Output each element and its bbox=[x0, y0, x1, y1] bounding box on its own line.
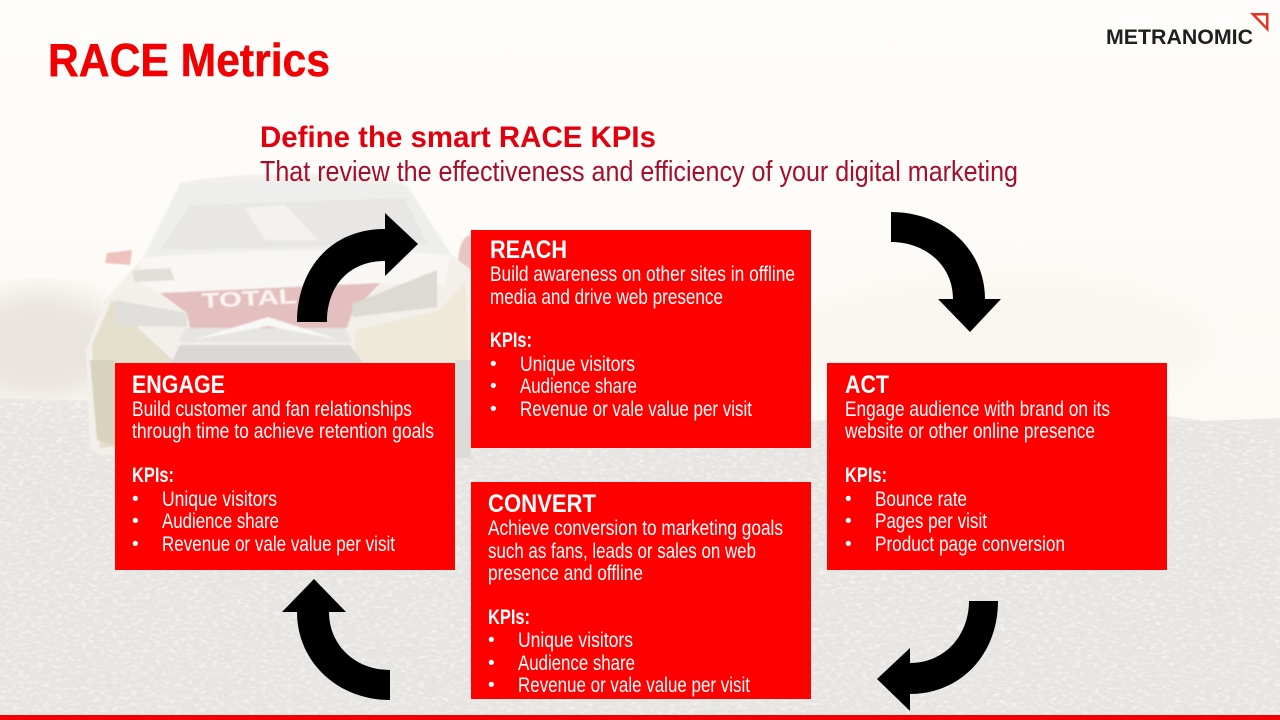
panel: reach: Build awareness on other sites in offline bbox=[490, 263, 795, 286]
panel: reach: • bbox=[490, 399, 497, 420]
panel: act: website or other online presence bbox=[844, 420, 1095, 443]
panel: engage: through time to achieve retention goals bbox=[132, 420, 434, 443]
panel: engage: • bbox=[132, 489, 139, 510]
logo: Metranomic bbox=[1106, 13, 1268, 49]
car silhouette: TOTAL bbox=[201, 285, 297, 313]
panel: act: ACT bbox=[845, 371, 889, 399]
panel: reach: Audience share bbox=[520, 375, 637, 398]
panel: reach: REACH bbox=[490, 236, 567, 264]
arrow: act to convert bbox=[877, 601, 998, 711]
panel: act: Bounce rate bbox=[875, 488, 967, 511]
arrow: reach to act bbox=[891, 212, 1001, 332]
subtitle heading: Define the smart RACE KPIs bbox=[260, 121, 656, 154]
panel: engage: Unique visitors bbox=[162, 488, 277, 511]
car silhouette bbox=[86, 174, 471, 458]
panel: act: • bbox=[845, 534, 852, 555]
panel: convert: • bbox=[488, 653, 495, 674]
panel: reach: • bbox=[490, 376, 497, 397]
panel: convert: • bbox=[488, 675, 495, 696]
arrow: convert to engage bbox=[282, 579, 390, 700]
panel: engage: • bbox=[132, 534, 139, 555]
panel: convert: Audience share bbox=[518, 652, 635, 675]
panel: act bbox=[827, 363, 1167, 570]
panel: convert: Revenue or vale value per visit bbox=[518, 674, 750, 697]
panel: engage: Build customer and fan relationships bbox=[132, 398, 412, 421]
panel: convert bbox=[471, 482, 811, 699]
panel: act: • bbox=[845, 489, 852, 510]
panel: engage: Revenue or vale value per visit bbox=[162, 533, 395, 556]
panel: convert: such as fans, leads or sales on web bbox=[488, 540, 756, 563]
panel: act: Engage audience with brand on its bbox=[845, 398, 1110, 421]
logo: Metranomic: METRANOMIC bbox=[1106, 26, 1253, 49]
panel: act: KPIs: bbox=[845, 464, 887, 487]
panel: convert: presence and offline bbox=[488, 562, 643, 585]
panel: reach: Unique visitors bbox=[520, 353, 635, 376]
panel: reach: Revenue or vale value per visit bbox=[520, 398, 752, 421]
panel: convert: • bbox=[488, 630, 495, 651]
panel: reach: media and drive web presence bbox=[490, 286, 723, 309]
panel: reach bbox=[471, 230, 811, 448]
panel: engage: Audience share bbox=[162, 510, 279, 533]
title: RACE Metrics bbox=[48, 34, 330, 86]
footer bar bbox=[0, 715, 1280, 720]
panel: convert: KPIs: bbox=[488, 606, 530, 629]
panel: reach: KPIs: bbox=[490, 329, 532, 352]
panel: convert: Unique visitors bbox=[518, 629, 633, 652]
panel: engage bbox=[115, 363, 455, 570]
panel: convert: Achieve conversion to marketing goals bbox=[488, 517, 783, 540]
panel: act: Pages per visit bbox=[875, 510, 987, 533]
subtitle description: That review the effectiveness and efficiency of your digital marketing bbox=[260, 156, 1018, 188]
panel: convert: CONVERT bbox=[488, 490, 596, 518]
panel: engage: ENGAGE bbox=[132, 371, 225, 399]
panel: engage: • bbox=[132, 511, 139, 532]
panel: act: Product page conversion bbox=[875, 533, 1065, 556]
arrow: engage to reach bbox=[297, 213, 418, 322]
panel: act: • bbox=[845, 511, 852, 532]
panel: reach: • bbox=[490, 354, 497, 375]
panel: engage: KPIs: bbox=[132, 464, 174, 487]
